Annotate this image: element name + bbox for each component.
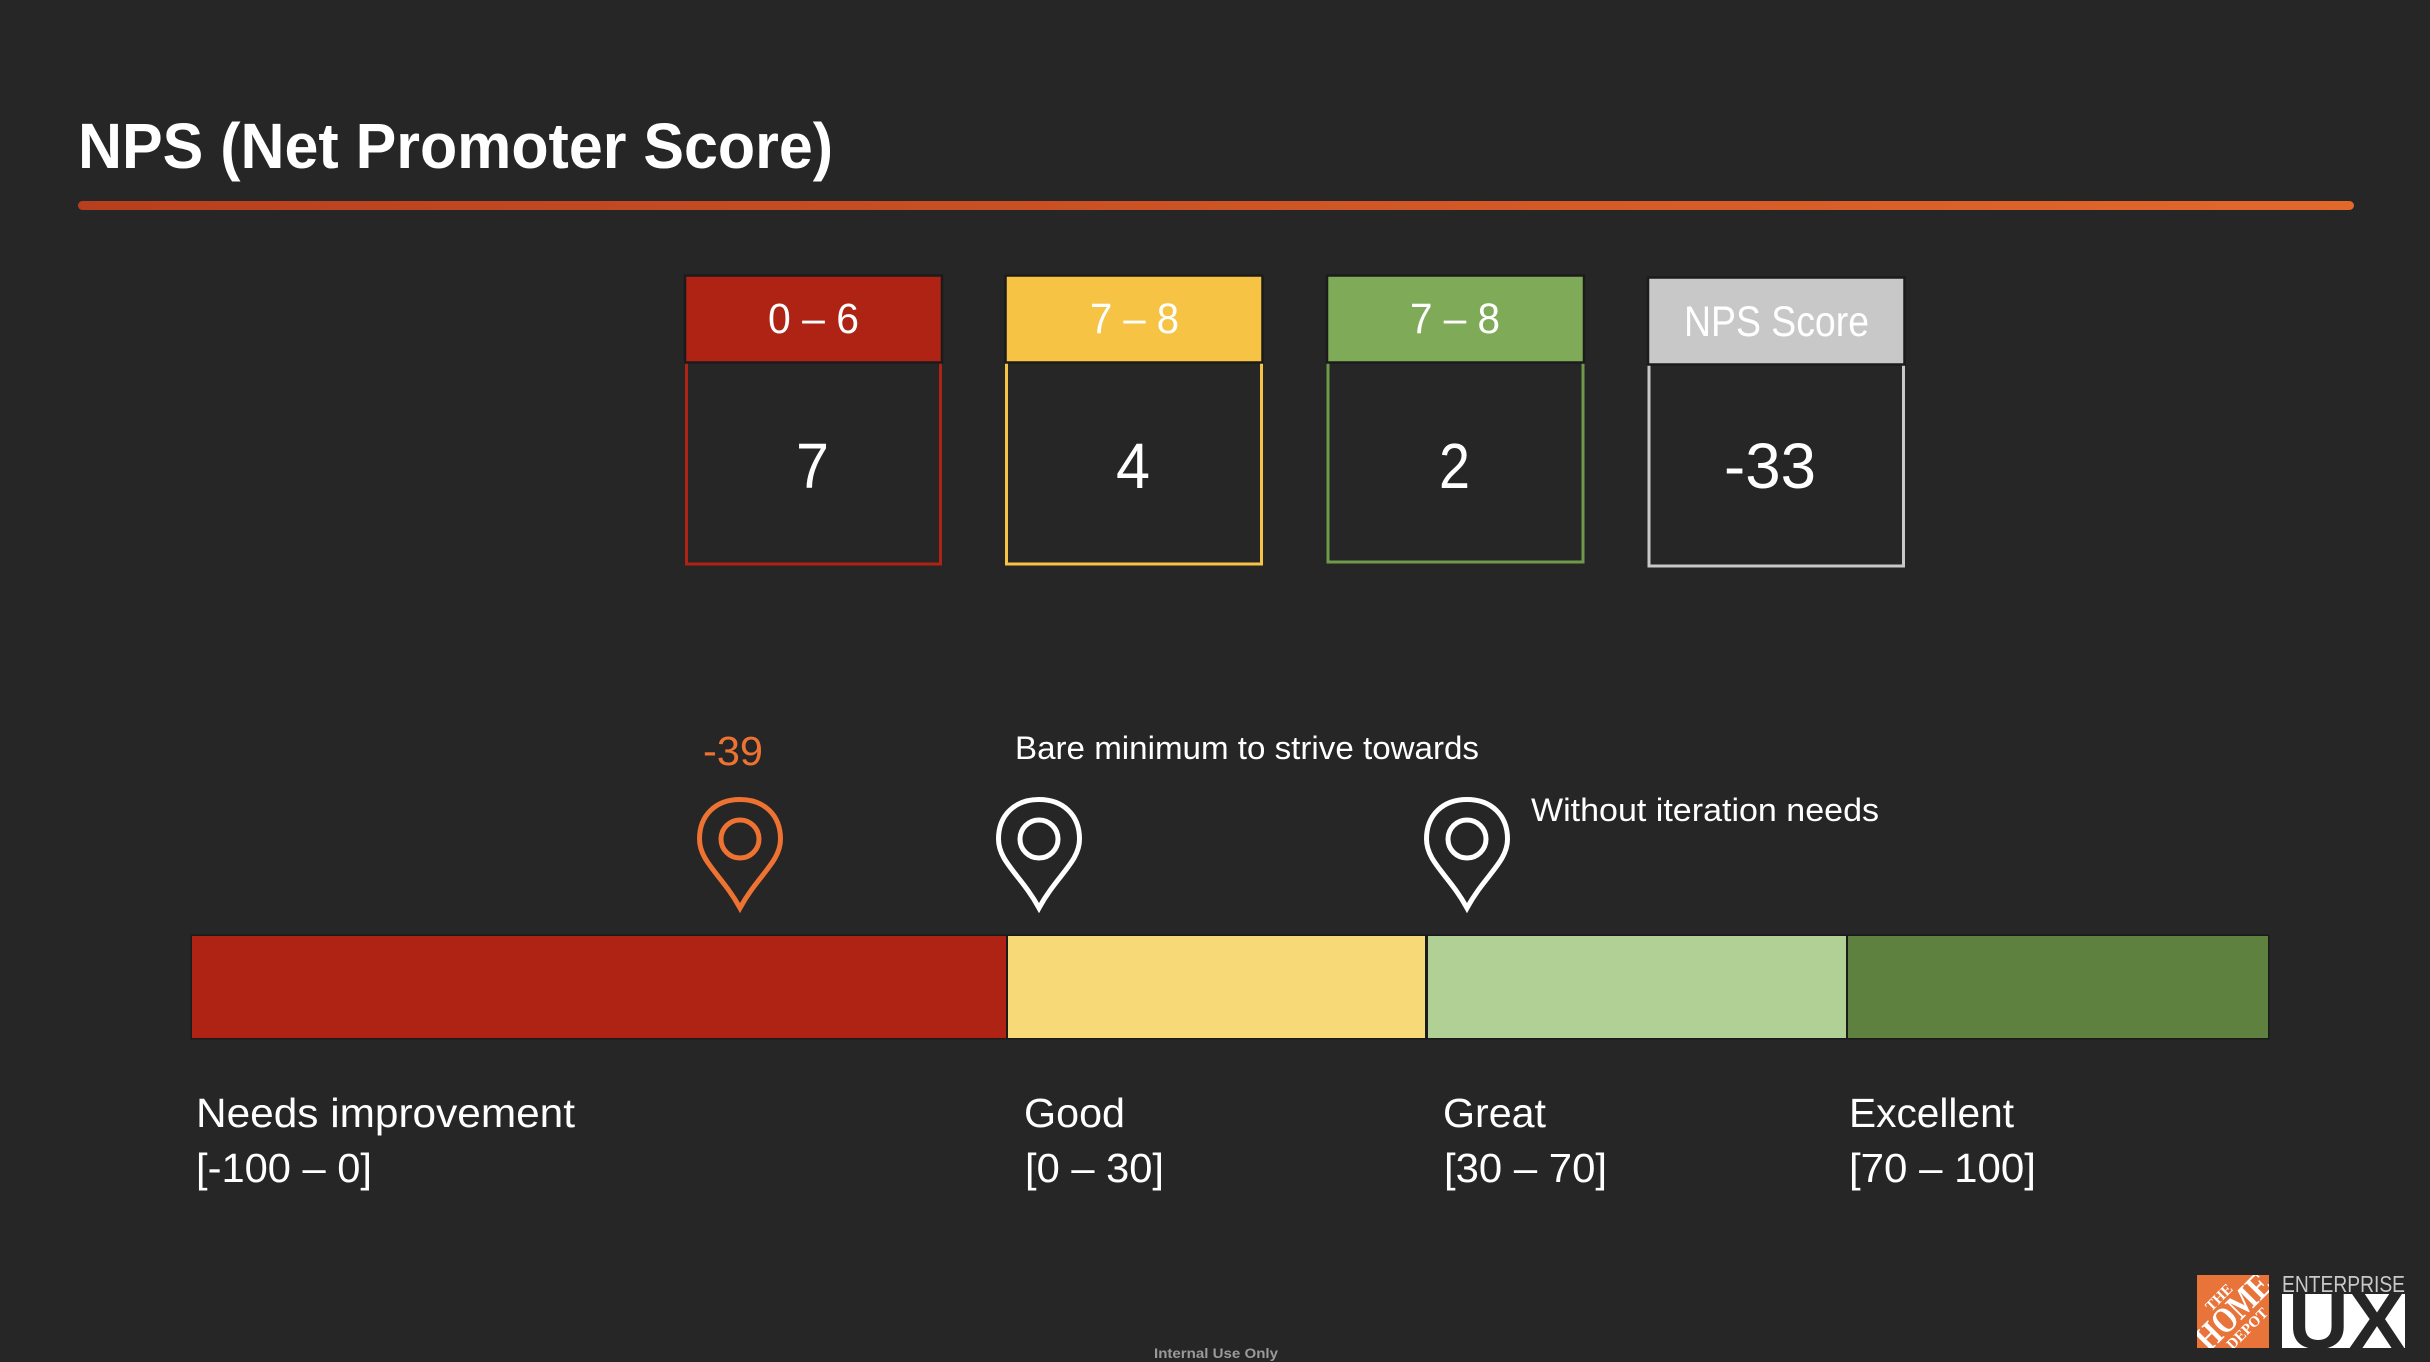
label: good: Good <box>1024 1090 1125 1136</box>
panel: NPS score card <box>1648 278 1904 566</box>
detractors range: 0 – 6 <box>768 295 859 343</box>
panel: promoters score card <box>1327 276 1584 562</box>
logo: home depot: DEPOT <box>2224 1305 2272 1353</box>
logo: home depot <box>2197 1275 2269 1348</box>
label: excellent: [70 – 100] <box>1849 1145 2036 1191</box>
label: good <box>1024 1090 1164 1191</box>
icon: white map pin good <box>998 800 1080 908</box>
title: NPS (Net Promoter Score) <box>78 110 833 182</box>
label: needs improvement: [-100 – 0] <box>196 1145 372 1191</box>
logo: home depot: HOME <box>2186 1265 2280 1358</box>
title rule <box>78 201 2354 210</box>
icon: white map pin great <box>1426 800 1508 908</box>
NPS score heading: NPS Score <box>1684 298 1869 346</box>
panel: passives score card <box>1006 276 1262 564</box>
logo: home depot: THE <box>2203 1281 2236 1315</box>
icon: orange map pin <box>700 800 780 908</box>
label: needs improvement: Needs improvement <box>196 1090 576 1136</box>
NPS score value: -33 <box>1724 430 1816 502</box>
segment: excellent <box>1848 936 2268 1038</box>
segment: good <box>1008 936 1425 1038</box>
label: great: Great <box>1443 1090 1547 1136</box>
passives count: 4 <box>1116 430 1150 502</box>
detractors count: 7 <box>796 430 829 502</box>
label: great: [30 – 70] <box>1444 1145 1607 1191</box>
panel: detractors score card <box>685 276 942 564</box>
label: needs improvement <box>196 1090 576 1191</box>
label: excellent: Excellent <box>1849 1090 2015 1136</box>
segment: needs improvement <box>192 936 1006 1038</box>
logo: enterprise ux: ENTERPRISE <box>2282 1271 2405 1297</box>
label: good: [0 – 30] <box>1025 1145 1164 1191</box>
label: excellent <box>1849 1090 2036 1191</box>
passives range: 7 – 8 <box>1090 295 1179 343</box>
scale bar <box>190 934 2270 1040</box>
footer note: Internal Use Only <box>1154 1345 1278 1361</box>
segment: great <box>1428 936 1846 1038</box>
annotation: bare minimum: Bare minimum to strive towards <box>1015 730 1479 766</box>
current score value: -39 <box>703 728 763 774</box>
promoters count: 2 <box>1439 430 1470 502</box>
annotation: without iteration: Without iteration needs <box>1531 792 1879 828</box>
label: great <box>1443 1090 1607 1191</box>
promoters range: 7 – 8 <box>1410 295 1500 343</box>
